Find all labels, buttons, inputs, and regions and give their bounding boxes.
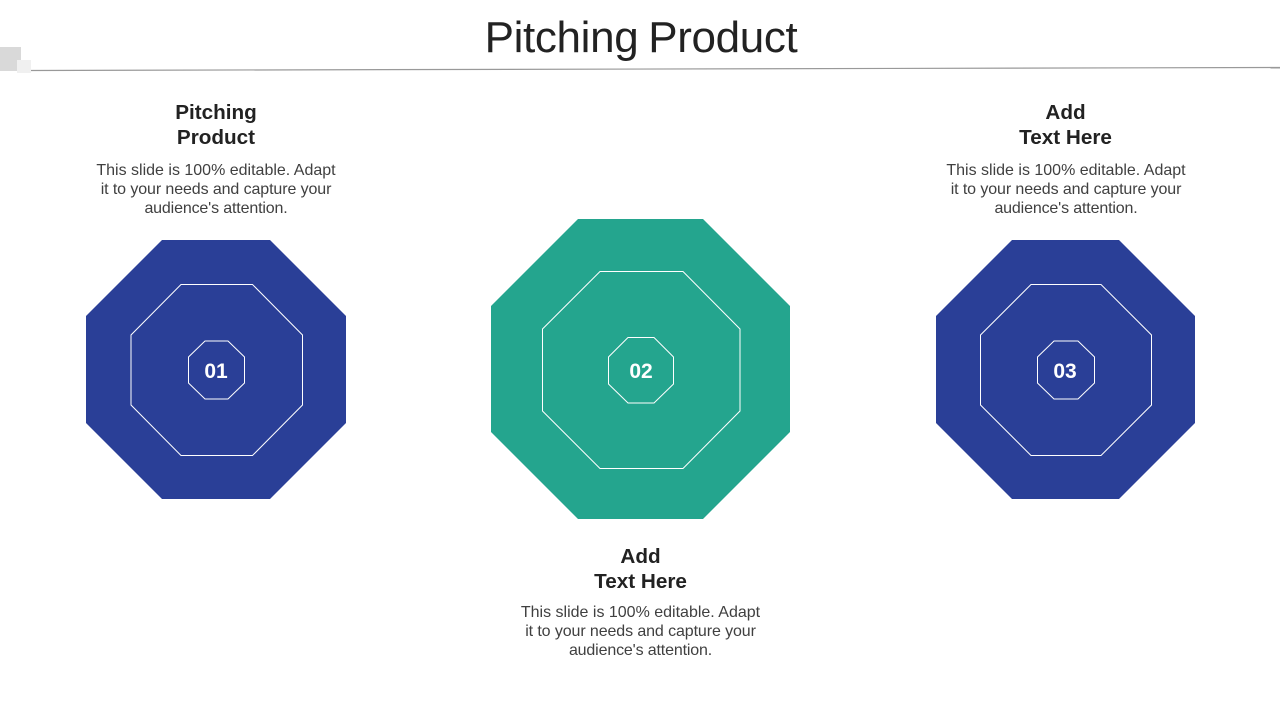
text block: left column: it to your needs and capture your [101, 181, 331, 198]
text block: right column [946, 162, 1186, 217]
header rule and corner decoration [0, 47, 1280, 73]
text block: center column: it to your needs and capture your [525, 623, 756, 640]
icon: octagon 03 [936, 240, 1195, 499]
text block: left column: audience's attention. [144, 200, 288, 217]
text block: center column: This slide is 100% editable. Adapt [521, 604, 760, 621]
heading: right column: Add [1045, 101, 1086, 124]
text block: left column: This slide is 100% editable. Adapt [96, 162, 336, 179]
text block: center column [521, 604, 760, 659]
heading: center column: Text Here [594, 570, 687, 593]
text block: left column [96, 162, 336, 217]
text block: right column: This slide is 100% editable. Adapt [946, 162, 1186, 179]
title: Pitching Product [485, 13, 797, 62]
heading: left column: Pitching [175, 101, 257, 124]
icon: octagon 01 [86, 240, 346, 499]
heading: right column [1019, 101, 1112, 149]
text block: center column: audience's attention. [569, 642, 712, 659]
text block: right column: audience's attention. [994, 200, 1138, 217]
heading: left column: Product [177, 126, 255, 149]
text block: right column: it to your needs and capture your [951, 181, 1181, 198]
heading: right column: Text Here [1019, 126, 1112, 149]
icon: octagon 02 [491, 219, 790, 519]
icon: octagon 01: 01 [204, 360, 228, 383]
heading: left column [175, 101, 257, 149]
heading: center column: Add [620, 545, 661, 568]
icon: octagon 03: 03 [1053, 360, 1077, 383]
heading: center column [594, 545, 687, 593]
icon: octagon 02: 02 [629, 360, 653, 383]
